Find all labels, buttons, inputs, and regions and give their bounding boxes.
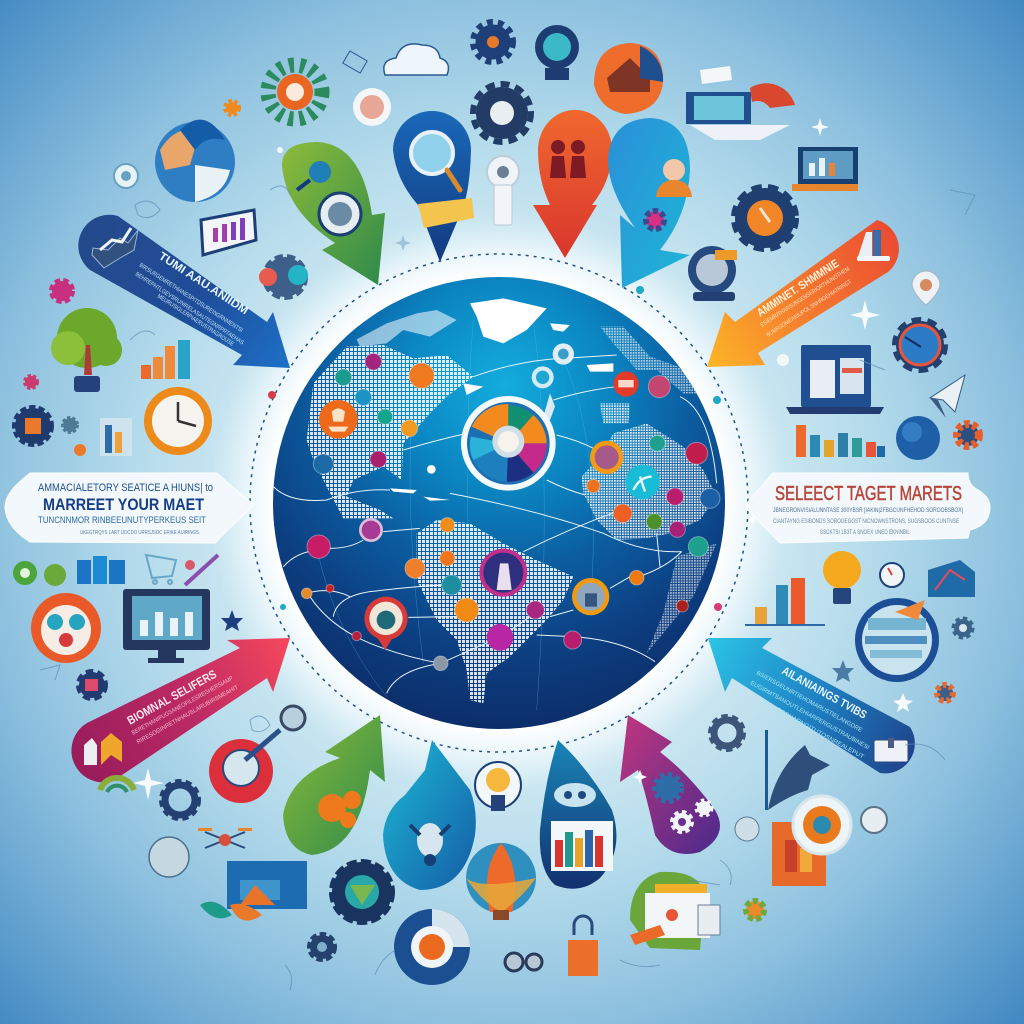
icon: robot figure: [410, 823, 450, 866]
arrow body text: MIRUEBSHARNGITUTOSNREALEPUT: [761, 700, 865, 761]
icon: light bulb in ring: [475, 762, 521, 811]
icon: blue screen with leaves: [200, 861, 307, 921]
icon: folder documents: [630, 872, 720, 950]
arrow body text: BSIERSGEUNRTIEHOMARUSTIELANGDRE: [755, 671, 863, 734]
banner heading: MARREET YOUR MAET: [43, 496, 204, 514]
banner line 2: TUNCNNMOR RINBEEUNUTYPERKEUS SEIT: [38, 515, 206, 526]
icon: green cluster: [44, 564, 66, 586]
icon: white clock small: [861, 807, 887, 833]
continent: north america: [307, 345, 473, 518]
icon: building laptop: [786, 345, 884, 414]
icon: pressure machine: [688, 246, 737, 301]
arrow heading: AMMINET. SHMMNIE: [755, 258, 842, 320]
islands: [390, 323, 613, 501]
icon: line chart: [92, 228, 138, 268]
banner line 2: CIANTAYNG ESIBONDS SOROGEGGST NICNOWNSTRONS, SUGSBOOS CUNTNSE: [773, 518, 959, 525]
icon: bottle and house: [84, 733, 122, 765]
pin: top-right teal: [608, 118, 692, 288]
icon: large navy gear: [473, 84, 531, 142]
icon: green gear lower right: [746, 901, 764, 919]
icon: round badge: [319, 193, 361, 235]
icon: people: [550, 140, 586, 178]
icon: navy gear with orange square: [15, 408, 51, 444]
icon: red magnifier badge: [209, 706, 305, 803]
continent: europe: [600, 327, 703, 393]
halo ring around globe: [209, 213, 789, 793]
icon: tree: [51, 308, 122, 392]
icon: cloud: [384, 44, 448, 75]
icon: orange house pin: [594, 43, 663, 114]
icon: small laptop top right: [792, 147, 858, 191]
icon: gauge gear: [896, 321, 944, 369]
continent: africa: [582, 423, 717, 540]
arrow: bottom-left red callout: [71, 638, 290, 782]
icon: sparkle: [133, 768, 164, 800]
icon: bar chart right: [796, 425, 885, 457]
continent: iberia: [600, 403, 630, 424]
icon: globe with fish: [155, 120, 235, 202]
continent: south america: [417, 520, 573, 703]
arrow: top-left blue callout: [78, 215, 290, 368]
icon: lens target: [394, 909, 470, 985]
icon: navy gear with pink square: [79, 672, 105, 698]
arrow heading: AILANIAINGS TVIBS: [780, 665, 869, 722]
sparkles: [395, 118, 880, 784]
icon: drone: [198, 828, 252, 848]
banner line 3: SSCKTSI 1B3T A SNOEX UNED EKNINBIL: [820, 529, 910, 536]
icon: globe outline small: [735, 817, 759, 841]
banner line 1: AMMACIALETORY SEATICE A HIUNS| to: [38, 482, 213, 494]
arrow body text: BUMRSOMEANIUPOL SNHRGEHIATRINGT: [766, 279, 853, 339]
icon: blue boxes: [77, 556, 125, 584]
icon: white star: [893, 693, 913, 712]
route lines: [273, 355, 717, 693]
icon: blueprint small: [343, 51, 367, 73]
mini bar chart card: [551, 821, 613, 871]
banner line 3: UKEGTRQYS LART UOCDO URRSJSOC ERIKE AUIRINGS.: [80, 530, 200, 536]
continent: arctic islands: [357, 310, 457, 347]
arrow body text: BEHREPHTLGEVSRUNIRELASAUTEGNRPRTAEHAS: [134, 272, 245, 346]
icon: pole: [765, 730, 768, 810]
arrow body text: BERETHANIPUGSANEOFILESREGHERSIAMP: [131, 676, 235, 737]
icon: small gauge: [880, 563, 904, 587]
icon: navy gear top: [473, 22, 513, 62]
icon: white keyhole tag: [487, 156, 519, 225]
pin: top-left green: [282, 142, 385, 285]
icon: navy gear bottom: [162, 782, 198, 818]
continent: lower right landmass: [647, 543, 717, 653]
icon: hot air balloon: [466, 843, 536, 920]
arrow body text: RIRESOGINRETNHAUSLARUBIRSMEAHIT: [136, 685, 240, 746]
icon: lightbulb: [823, 551, 861, 604]
icon: feather: [768, 745, 830, 810]
icon: city tower: [857, 230, 890, 261]
icon: blue chart box: [928, 560, 975, 597]
icon: small orange gear: [226, 102, 238, 114]
icon: blue ball: [896, 416, 940, 460]
ribbon: [418, 198, 474, 228]
icon: clock: [144, 387, 212, 455]
map badges: [301, 343, 720, 671]
icon: pink blob: [52, 281, 72, 301]
icon: bars right lower: [745, 578, 825, 625]
arrow heading: BIOMNAL SELIFERS: [125, 667, 219, 728]
icon: orange puzzle: [318, 791, 361, 828]
icon: shopping cart: [146, 555, 176, 584]
pin: bottom purple arrow: [620, 715, 720, 854]
arrow body text: BIRSURGEMRETHIANESPITDSUREINGRNMENTSI: [138, 263, 244, 334]
icon: orange padlock: [568, 916, 598, 976]
icon: white target: [114, 164, 138, 188]
icon: orange hub: [74, 444, 86, 456]
icon: chart box: [100, 418, 132, 456]
central globe: [273, 277, 725, 729]
icon: briefcase: [874, 738, 908, 762]
icon: small orange gear right: [937, 685, 953, 701]
icon: small bar chart: [141, 340, 190, 379]
icon: large gear with orange dial: [735, 188, 795, 248]
icon: purple pencil: [185, 555, 218, 585]
globe meridian lines: [317, 320, 593, 710]
icon: magnifier: [411, 132, 460, 190]
left banner: [5, 473, 252, 543]
icon: orange face badge: [31, 593, 101, 663]
icon: robot face: [554, 783, 596, 807]
icon: dark gear bottom: [310, 935, 334, 959]
icon: brain: [353, 88, 391, 126]
icon: laptop and arc: [686, 66, 795, 140]
icon: person: [656, 159, 692, 197]
icon: teal magnifier: [297, 161, 331, 190]
icon: navy star: [221, 610, 243, 631]
right banner: [746, 473, 990, 543]
arrow: bottom-right teal callout: [708, 638, 915, 773]
icon: navy gear right: [711, 717, 743, 749]
banner line 1: JBNEGRONVISIALUNNTASE 300YBSR [IAKIN|2FBGCUNFHEHOD SOROOBSBOX]: [773, 507, 963, 514]
arrow body text: EUGIRMTSANOUTLEHIARPERGUSTRAUBINESI: [749, 681, 870, 751]
icon: small pink flower: [25, 376, 37, 388]
banner heading: SELEECT TAGET MARETS: [775, 483, 962, 505]
continent: greenland: [470, 298, 547, 343]
icon: green circle left: [13, 561, 37, 585]
small accent dots: [268, 147, 789, 611]
arrow heading: TUMI AAU.ANIIDM: [156, 250, 250, 317]
icon: navy star right: [832, 660, 854, 682]
pin: bottom green: [283, 715, 385, 855]
pin: top red: [533, 110, 612, 258]
pin: bottom teal: [383, 740, 476, 890]
arrow body text: MEURUSIGLERPIAERUSTRAGROUSE: [156, 294, 235, 348]
icon: grey gear: [63, 418, 77, 432]
icon: rocket: [930, 375, 965, 418]
icon: small grey gear: [954, 619, 972, 637]
icon: rainbow arc: [100, 778, 134, 792]
icon: purple gear: [646, 211, 664, 229]
central dial magnifier: [461, 393, 556, 491]
icon: orange gear: [957, 424, 979, 446]
pin: bottom navy drop: [540, 740, 616, 889]
icon: orange gadget ring: [793, 796, 851, 854]
arrow body text: ESIEMRITHARSUNGENSERIORTHUNOTHEM: [760, 266, 851, 329]
arrow: top-right orange callout: [707, 220, 899, 367]
icon: orange document: [772, 822, 826, 886]
icon: monitor: [123, 589, 210, 663]
icon: report globe: [855, 598, 939, 682]
icon: puzzle gear camera: [259, 257, 308, 297]
icon: teal ring device: [535, 25, 579, 80]
icon: binoculars: [505, 953, 542, 971]
icon: gears: [656, 776, 711, 831]
icon: location pin: [912, 271, 940, 305]
icon: purple bars screen: [201, 210, 256, 255]
icon: sun gear: [268, 65, 322, 119]
icon: glass sphere: [149, 837, 189, 877]
pin: top blue magnifier: [393, 111, 474, 262]
icon: iris hexagon: [332, 862, 392, 922]
